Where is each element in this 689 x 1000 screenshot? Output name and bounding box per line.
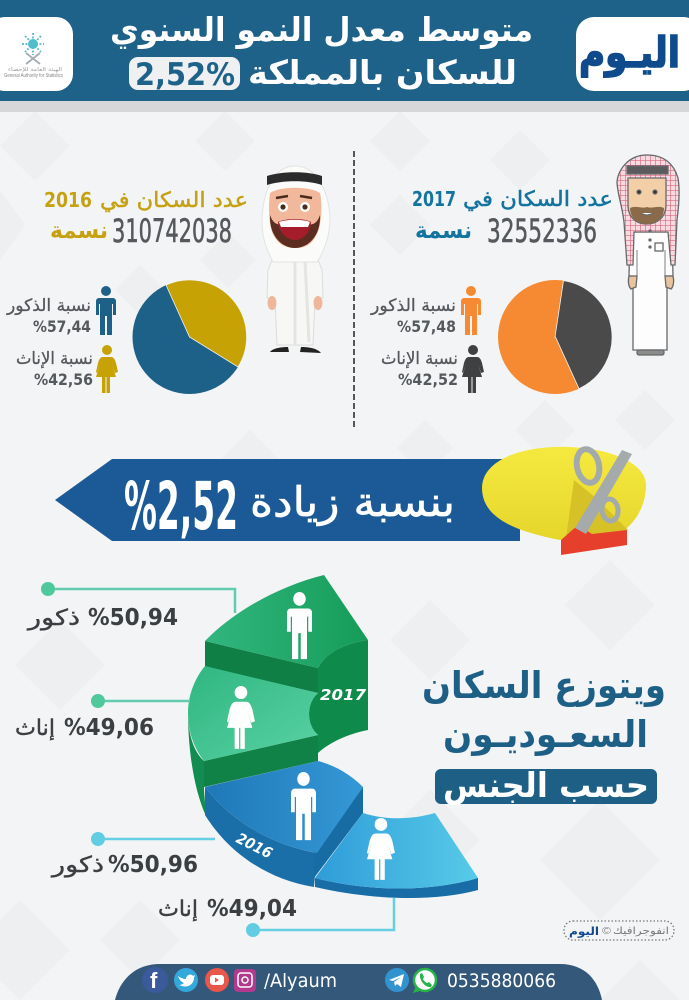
population 2016 — [50, 212, 232, 250]
icon: instagram — [234, 969, 256, 992]
logo: General Authority for Statistics — [0, 17, 73, 91]
logo: Alyaum — [576, 17, 689, 91]
icon: male 2016 in chart — [291, 772, 316, 840]
callout: females 2017: %49,06 — [64, 715, 154, 741]
male share 2016 — [6, 296, 91, 336]
banner arrow: increase rate: %2,52 — [124, 468, 238, 545]
credit badge: انفوجرافيك — [613, 926, 669, 937]
title: متوسط معدل النمو السنوي — [110, 10, 533, 50]
female share 2017: %42,52 — [398, 370, 458, 389]
segment: male 2016 — [205, 761, 363, 853]
female share 2016 — [16, 349, 93, 389]
character: man in white ghutra — [262, 166, 330, 353]
front face female 2016 — [315, 878, 478, 898]
callout: females 2017: إناث — [15, 716, 55, 741]
segment: female 2016 — [315, 813, 478, 888]
callout: males 2017: %50,94 — [88, 605, 178, 631]
icon: facebook: f — [150, 968, 158, 993]
text block: distribution by gender: السعـوديـون — [443, 713, 648, 756]
front face male 2016 — [205, 787, 317, 887]
icon: whatsapp — [413, 969, 436, 993]
pie chart 2017 — [498, 280, 612, 394]
callout: females 2016: إناث — [158, 897, 198, 922]
heading 2016 — [44, 188, 248, 212]
icon: twitter — [174, 968, 198, 992]
banner arrow: increase rate — [55, 459, 520, 545]
female share 2016: %42,56 — [34, 370, 93, 389]
callout: males 2017: ذكور — [27, 606, 80, 631]
heading 2017: عدد السكان في — [463, 187, 613, 211]
callout: males 2016 — [51, 832, 215, 878]
logo: General Authority for Statistics: General Authority for Statistics — [4, 73, 63, 79]
icon: facebook — [142, 967, 168, 993]
highlighted figure: 2,52% — [135, 57, 235, 93]
icon: female 2016 in chart — [367, 818, 395, 880]
male share 2016: %57,44 — [33, 317, 91, 336]
text block: distribution by gender: ويتوزع السكان — [422, 664, 666, 707]
heading 2017: 2017 — [412, 187, 456, 211]
population 2017: 32552336 — [487, 212, 597, 250]
icon: female 2017 — [462, 345, 484, 393]
heading 2017 — [412, 187, 613, 211]
text block: distribution by gender — [422, 664, 666, 806]
icon: male 2017 — [461, 286, 481, 335]
icon: female 2016 — [96, 345, 118, 393]
segment: female 2017 — [188, 666, 318, 761]
male share 2017: نسبة الذكور — [370, 296, 456, 316]
header band — [0, 0, 689, 112]
icon: youtube — [205, 968, 229, 992]
female share 2017: نسبة الإناث — [381, 349, 458, 369]
2017 inner side — [309, 640, 368, 753]
logo: General Authority for Statistics: الهيئة العامة للإحصاء — [8, 67, 62, 73]
pie chart 2016 — [132, 280, 247, 394]
icon: yellow pie with percent sign — [482, 447, 646, 555]
social handle: /Alyaum — [264, 970, 337, 992]
icon: telegram — [385, 968, 409, 992]
female share 2017 — [381, 349, 458, 389]
label 2016: 2016 — [233, 829, 275, 862]
callout: males 2016: ذكور — [51, 853, 104, 878]
increase label: بنسبة زيادة — [250, 478, 455, 526]
population 2016: نسمة — [50, 218, 108, 244]
panel: 2017 population — [370, 155, 679, 394]
male share 2017 — [370, 296, 456, 336]
heading 2016: عدد السكان في — [100, 188, 248, 212]
title: للسكان بالمملكة — [248, 53, 517, 92]
segment: male 2017 — [205, 575, 368, 668]
title — [110, 10, 533, 93]
chart: population by gender, 3D ring — [188, 575, 478, 898]
panel: 2016 population — [6, 166, 330, 394]
character: man in red shemagh — [617, 155, 679, 355]
population 2017 — [415, 212, 597, 250]
population 2016: 310742038 — [112, 212, 232, 250]
highlighted label: حسب الجنس — [443, 766, 649, 806]
female share 2016: نسبة الإناث — [16, 349, 93, 369]
footer bar — [115, 964, 602, 1000]
male share 2017: %57,48 — [397, 317, 456, 336]
icon: male 2016 — [96, 286, 116, 335]
credit badge: © — [602, 926, 612, 937]
male share 2016: نسبة الذكور — [6, 296, 91, 316]
population 2017: نسمة — [415, 218, 472, 244]
callout: females 2016 — [158, 896, 394, 937]
credit badge — [564, 921, 674, 940]
callout: females 2016: %49,04 — [207, 896, 297, 922]
icon: female 2017 in chart — [227, 686, 255, 749]
icon: male 2017 in chart — [287, 592, 312, 659]
callout: females 2017 — [15, 694, 190, 741]
callout: males 2017 — [27, 582, 235, 631]
credit badge: اليوم — [569, 925, 599, 938]
divider — [353, 151, 355, 428]
front face male 2017 — [205, 641, 318, 693]
front face female 2017 — [204, 735, 318, 787]
callout: males 2016: %50,96 — [108, 852, 198, 878]
phone number: 0535880066 — [447, 970, 556, 992]
heading 2016: 2016 — [44, 188, 92, 212]
label 2017: 2017 — [320, 686, 367, 704]
